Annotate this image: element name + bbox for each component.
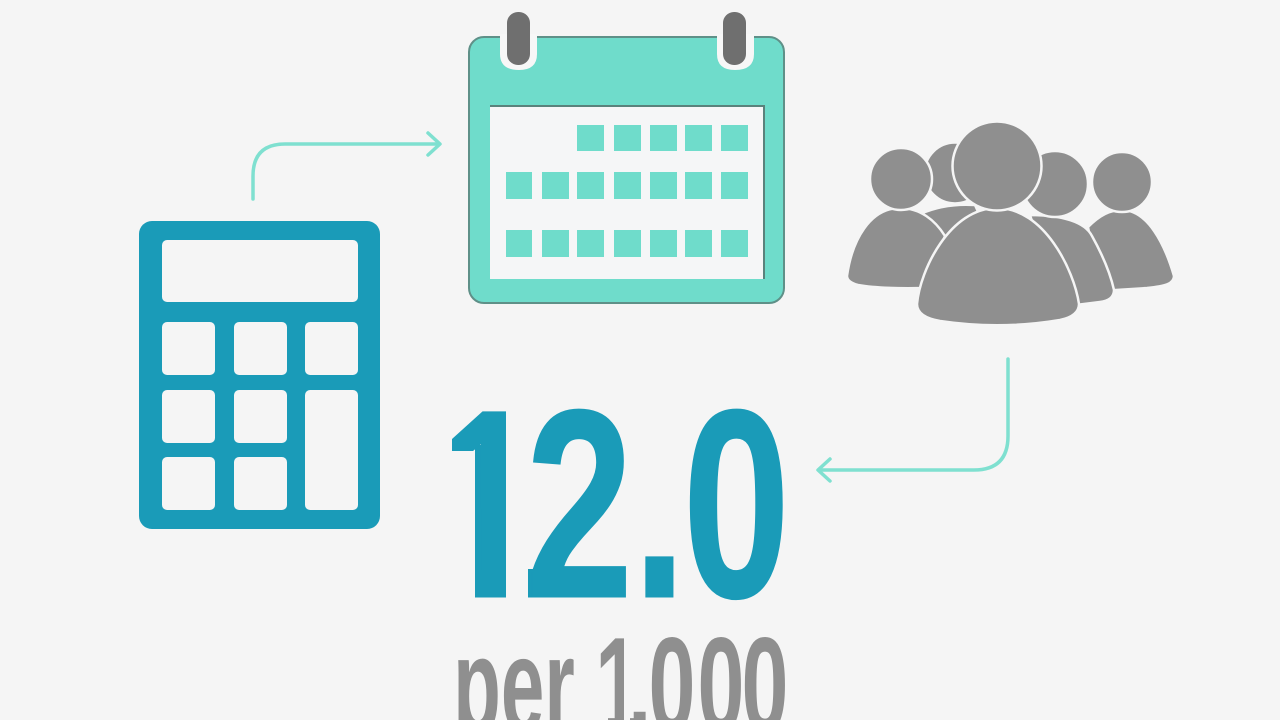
icon: calculator (139, 221, 380, 529)
calendar day squares (506, 125, 748, 257)
icon: calendar (469, 12, 784, 303)
arrow: calculator to calendar (253, 133, 440, 199)
icon: group of people (847, 122, 1174, 325)
big number (452, 408, 783, 600)
arrow: people to result (818, 359, 1008, 481)
caption: per 1.000 (458, 637, 785, 720)
big number: 12.0 (436, 354, 790, 654)
